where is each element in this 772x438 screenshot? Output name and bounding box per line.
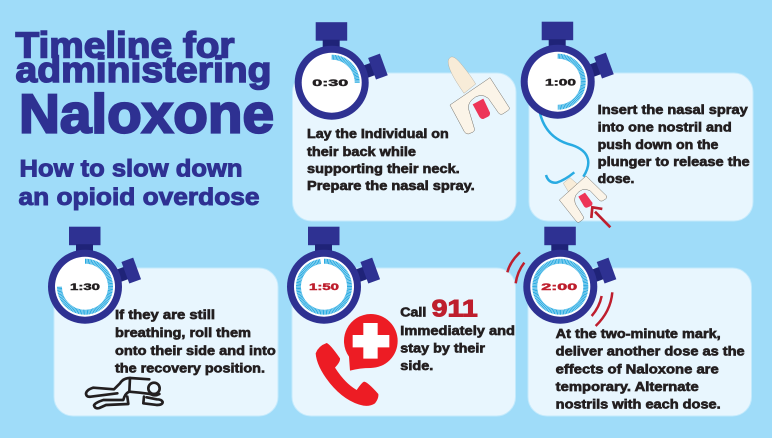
- text: step 1:00: plunger to release the: [598, 154, 750, 169]
- stopwatch 1:50: 1:50: [309, 282, 339, 293]
- text: step 1:50: 911: [432, 296, 478, 323]
- text: step 1:50: [400, 296, 515, 373]
- text: step 1:50: Immediately and: [400, 323, 515, 338]
- text: step 1:30: onto their side and into: [115, 343, 276, 358]
- stopwatch 0:30: [295, 22, 388, 120]
- stopwatch 1:00: 1:00: [545, 78, 576, 89]
- icon: nasal spray with arrow: [559, 176, 610, 227]
- text: step 1:00: [598, 102, 750, 186]
- text: step 2:00: deliver another dose as the: [556, 344, 745, 359]
- title: Naloxone: [19, 82, 274, 144]
- stopwatch 1:30: [48, 227, 141, 324]
- text: step 1:50: stay by their: [400, 341, 485, 356]
- title: [16, 24, 274, 144]
- panel: step 1:50: [292, 268, 516, 416]
- title: administering: [16, 49, 272, 90]
- stopwatch 0:30: 0:30: [312, 78, 348, 89]
- text: step 2:00: temporary. Alternate: [556, 379, 699, 394]
- text: step 0:30: Lay the Individual on: [307, 126, 449, 141]
- text: step 1:30: [115, 307, 276, 376]
- icon: blue tube: [540, 113, 588, 183]
- panel: step 2:00: [528, 268, 752, 416]
- text: step 0:30: supporting their neck.: [307, 161, 460, 176]
- text: step 2:00: At the two-minute mark,: [556, 326, 721, 341]
- text: step 0:30: Prepare the nasal spray.: [307, 178, 475, 193]
- stopwatch 2:00: 2:00: [541, 282, 577, 293]
- text: step 1:50: side.: [400, 358, 433, 373]
- text: step 1:00: push down on the: [598, 137, 718, 152]
- icon: nasal spray: [448, 57, 509, 134]
- text: step 1:00: Insert the nasal spray: [598, 102, 749, 117]
- subtitle: How to slow down: [20, 156, 243, 182]
- title: Timeline for: [16, 24, 234, 66]
- panel: step 0:30: [292, 73, 516, 221]
- panel: step 1:30: [54, 268, 278, 416]
- panel: step 1:00: [529, 73, 753, 221]
- stopwatch 2:00: [523, 227, 616, 324]
- text: step 2:00: [556, 326, 745, 412]
- subtitle: an opioid overdose: [18, 184, 260, 211]
- icon: phone and medical speech bubble: [316, 314, 398, 406]
- stopwatch 1:30: 1:30: [70, 282, 100, 293]
- text: step 1:50: Call: [400, 305, 426, 320]
- text: step 1:30: breathing, roll them: [115, 325, 251, 340]
- text: step 1:30: the recovery position.: [115, 360, 265, 376]
- icon: person in recovery position: [86, 378, 163, 408]
- text: step 2:00: nostrils with each dose.: [556, 397, 721, 412]
- text: step 0:30: [307, 126, 475, 193]
- text: step 0:30: their back while: [307, 144, 416, 159]
- text: step 1:00: into one nostril and: [598, 120, 732, 134]
- text: step 1:30: If they are still: [115, 307, 215, 322]
- icon: red alarm waves: [507, 252, 612, 326]
- text: step 2:00: effects of Naloxone are: [556, 361, 719, 376]
- stopwatch 1:50: [287, 227, 380, 324]
- text: step 1:00: dose.: [598, 171, 634, 186]
- subtitle: [18, 156, 260, 211]
- stopwatch 1:00: [521, 22, 614, 119]
